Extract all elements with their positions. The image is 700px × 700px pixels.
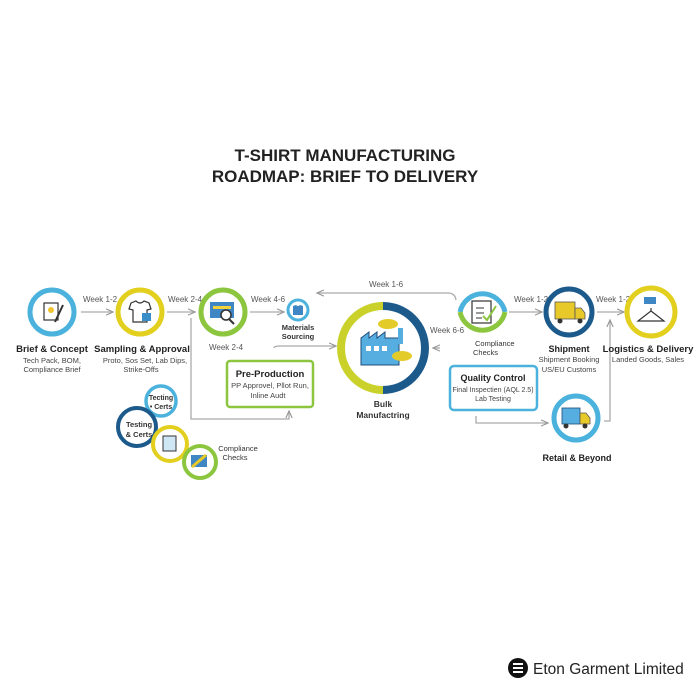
stage: Shipment: US/EU Customs: [542, 365, 597, 374]
icon: clipboard: [472, 301, 496, 323]
stage: Brief & Concept: [16, 290, 89, 374]
stage: Bulk Manufacturing: [341, 306, 425, 420]
icon: factory: [361, 319, 412, 365]
title: T-SHIRT MANUFACTURING: [235, 146, 455, 165]
cluster: Testing & Certs / Compliance Checks: & Certs: [126, 430, 152, 439]
panel: Quality Control: Final Inspectien (AQL 2.5): [452, 387, 534, 394]
stage: Brief & Concept: Brief & Concept: [16, 344, 89, 355]
icon: truck: [555, 302, 585, 324]
icon: truck: [562, 408, 590, 428]
stage: Compliance Checks top: Compliance: [475, 339, 515, 348]
panel: Pre-Production: Inline Audt: [250, 391, 286, 400]
title: ROADMAP: BRIEF TO DELIVERY: [212, 167, 479, 186]
stage: Compliance Checks top: Checks: [473, 348, 498, 357]
icon: t-shirt: [129, 301, 151, 322]
stage: Materials Sourcing: Sourcing: [282, 332, 315, 341]
week labels: Week 6-6: [430, 326, 465, 335]
stage: Shipment: Shipment: [548, 344, 590, 354]
week labels: Week 4-6: [251, 295, 286, 304]
stage: Retail & Beyond: Retail & Beyond: [542, 453, 612, 463]
cluster: Testing & Certs / Compliance Checks: Compliance: [218, 444, 258, 453]
stage: Logistics & Delivery: Logistics & Delivery: [603, 344, 694, 355]
panel: Quality Control: Lab Testing: [475, 396, 511, 403]
stage: Logistics & Delivery: [603, 288, 694, 364]
cluster: Testing & Certs / Compliance Checks: Tecting: [149, 395, 173, 402]
cluster: Testing & Certs / Compliance Checks: • Certs: [150, 404, 172, 411]
week labels: Week 1-6: [369, 280, 404, 289]
stage: Shipment: Shipment Booking: [539, 355, 599, 364]
cluster: Testing & Certs / Compliance Checks: [118, 386, 258, 478]
week labels: Week 2-4: [209, 343, 244, 352]
stage: Shipment: [539, 289, 599, 374]
stage: Sampling & Approval: [94, 290, 190, 374]
week labels: Week 1-2: [83, 295, 118, 304]
panel: Quality Control: [450, 366, 537, 410]
icon: notepad: [44, 303, 63, 322]
icon: hanger: [638, 297, 664, 321]
stage: Brief & Concept: Tech Pack, BOM,: [23, 356, 81, 365]
title: [212, 146, 479, 186]
cluster: Testing & Certs / Compliance Checks: Testing: [126, 420, 152, 429]
panel: Pre-Production: [227, 361, 313, 407]
panel: Pre-Production: Pre-Production: [236, 369, 304, 380]
stage: Bulk Manufacturing: Bulk: [374, 399, 392, 409]
week labels: Week 2-4: [168, 295, 203, 304]
week labels: [83, 280, 631, 352]
panel: Quality Control: Quality Control: [460, 373, 526, 383]
stage: Sampling & Approval: Proto, Sos Set, Lab Dips,: [103, 356, 187, 365]
stage: sourcing search: [201, 290, 245, 334]
stage: Materials Sourcing: [282, 300, 315, 341]
stage: Brief & Concept: Compliance Brief: [23, 365, 81, 374]
connector arrows: [81, 293, 624, 423]
week labels: Week 1-2: [596, 295, 631, 304]
panel: Pre-Production: PP Approvel, Pllot Run,: [231, 381, 309, 390]
cluster: Testing & Certs / Compliance Checks: Checks: [222, 453, 248, 462]
stage: Sampling & Approval: Sampling & Approval: [94, 344, 190, 355]
stage: Materials Sourcing: Materials: [282, 323, 314, 332]
stage: Compliance Checks top: [460, 294, 515, 357]
stage: Logistics & Delivery: Landed Goods, Sales: [612, 355, 684, 364]
stage: Bulk Manufacturing: Manufactring: [356, 410, 410, 420]
icon: magnifier: [210, 302, 234, 324]
stage: Retail & Beyond: [542, 396, 612, 463]
logo: Eton Garment Limited: [533, 661, 684, 678]
stage: Sampling & Approval: Strike-Offs: [123, 365, 159, 374]
week labels: Week 1-2: [514, 295, 549, 304]
